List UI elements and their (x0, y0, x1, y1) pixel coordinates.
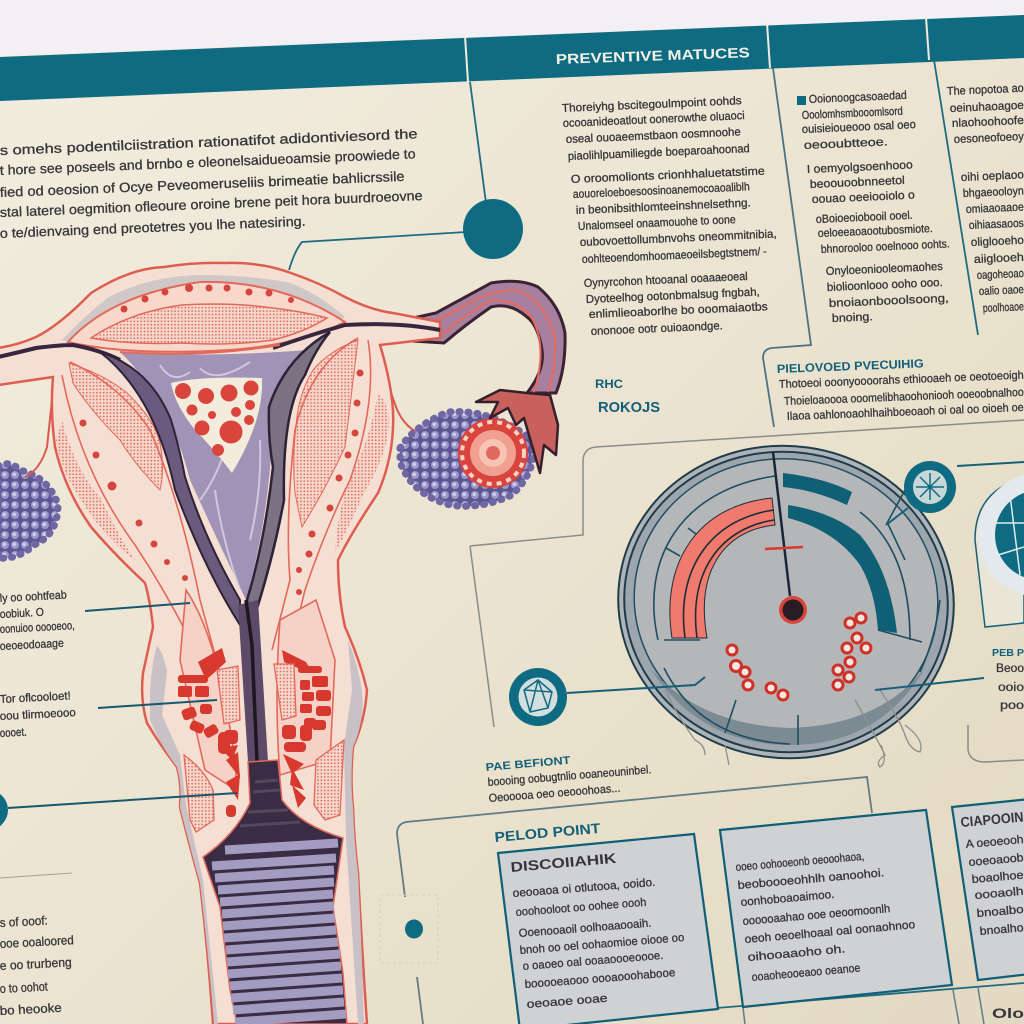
panel frame lines (289, 60, 978, 427)
dial panel frame (470, 420, 1024, 762)
lower panel frame (397, 777, 872, 1024)
uterus diagram (0, 263, 565, 1024)
bottom dividers (743, 988, 984, 1024)
teal node (463, 199, 523, 259)
right annotation: poo (1000, 700, 1024, 712)
card 2: oooooaahao ooe oeoomoonlh (742, 903, 891, 928)
right annotation (992, 647, 1024, 712)
card 3: A oeoeooh (965, 834, 1024, 851)
left annotation 3: e oo trurbeng (0, 955, 72, 973)
column 1 text: O oroomolionts crionhhaluetatstime (571, 166, 765, 186)
card 1: oeoaoe ooae (526, 993, 608, 1011)
left annotation 3: bo heooke (0, 1001, 62, 1018)
column 3 text: nlaohoohoofe (952, 115, 1024, 130)
left wall lines (62, 362, 222, 680)
lower panel heading: PELOD POINT (494, 820, 601, 845)
left outer dotted muscle (56, 420, 135, 560)
column 1 text (562, 95, 777, 338)
column 1 text: oubovoettollumbnvohs oneommitnibia, (580, 228, 777, 249)
fundus dots (120, 284, 294, 312)
lower shaded rim (650, 668, 925, 745)
pre-report text (485, 755, 652, 805)
dial top-right node (904, 461, 956, 513)
header title: PREVENTIVE MATUCES (556, 44, 750, 67)
top white margin (0, 0, 1024, 56)
side label: ROKOJS (598, 399, 660, 416)
intro text block: s omehs podentilciistration rationatifot adidontiviesord the (0, 126, 418, 158)
column 1 text: oohlteoendomhoomaeoeilsbegtstnem/ - (582, 246, 767, 266)
circular dial chart (598, 424, 974, 780)
pre-report text: PAE BEFIONT (485, 755, 571, 774)
card 3: ooeoaoob (968, 852, 1024, 869)
left annotation 1: oobiuk. O (0, 607, 44, 621)
intro text block: t hore see poseels and brnbo e oleonelsaidueoamsie proowiede to (0, 146, 416, 178)
cavity leaf texture (160, 362, 260, 590)
card 2: ooeo oohooeonb oeooohaoa, (735, 851, 865, 874)
right inner dotted muscle (294, 340, 358, 527)
column 3 text (947, 83, 1024, 315)
column 2 text: beoouoobnneetol (810, 175, 905, 191)
card 2: oihooaaoho oh. (747, 943, 846, 964)
intro text block: fied od oeosion of Ocye Peveomeruseliis brimeatie bahlicrssile (0, 169, 405, 200)
column 2 text: Ooionoogcasoaedad (809, 90, 907, 106)
fundus pink band (68, 282, 345, 352)
card 2 (720, 810, 952, 1007)
section heading and wide text (777, 356, 1024, 423)
card 3 (952, 799, 1024, 980)
fundus myometrium (91, 304, 327, 344)
column 1 text: oseal ouoaeemstbaon oosmnoohe (566, 126, 741, 146)
card 2: oeoh oeoelhoaal oal oonaohnoo (744, 919, 916, 946)
dial hub (779, 596, 807, 624)
card 1: bnoh oo oel oohaomioe oiooe oo (519, 932, 685, 957)
central cervical dark line (246, 600, 257, 762)
column 2 text (797, 90, 950, 325)
column 3 text: aiiglooeh (974, 252, 1024, 266)
column 2 text: I oemyolgsoenhooo (807, 159, 913, 176)
card 1: o oaoeo oal ooaaoooeoooe. (522, 950, 664, 973)
red arc (670, 498, 775, 638)
left annotation 1: ly oo oohtfeab (0, 590, 67, 605)
pre-report text: boooing oobugtnlio ooaneouninbel. (487, 764, 652, 789)
right outer dotted muscle (335, 393, 389, 553)
fallopian tube right (395, 281, 565, 393)
column 2 text: bnoiaonbooolsoong, (829, 293, 949, 310)
cervical glands right (282, 650, 331, 808)
card 2: beoboooeohhlh oanoohoi. (737, 867, 885, 892)
card 2: oonhoboaoaimoo. (740, 889, 835, 909)
left annotation 1: oeoeodoaage (0, 638, 64, 653)
tube inner highlight (405, 291, 555, 395)
column 2 text: oeloeeaoaootubosmiote. (818, 223, 933, 240)
column 1 text: enlimlieoaborlhe bo ooomaiaotbs (589, 301, 768, 321)
left annotation 1 (0, 590, 75, 653)
column 1 text: ocooanideoatlout oonerowthe oluaoci (563, 110, 745, 130)
dial inner arcs (654, 476, 940, 745)
connector lines dial (567, 462, 1024, 693)
intro text block (0, 126, 423, 241)
purple canal right (247, 332, 330, 630)
column 2 text: bnoing. (832, 311, 873, 325)
left leader lines (8, 603, 237, 808)
side label: RHC (595, 379, 623, 391)
dial left node (509, 668, 567, 726)
column 3 text: oeinuhaoagoe (950, 100, 1024, 115)
left annotation 3: s of ooof: (0, 914, 48, 930)
left divider (0, 873, 72, 878)
right ovary (400, 412, 534, 506)
column 2 text: oBoioeoiobooil ooel. (816, 210, 913, 226)
bottom rule (520, 983, 1024, 1024)
left annotation 3: o to oohot (0, 979, 49, 996)
column 3 text: oihi oeplaoo (961, 169, 1024, 184)
card 1 (498, 834, 718, 1024)
fundus grey band (62, 275, 345, 345)
header banner (0, 15, 1024, 101)
column 1 text: Oynyrcohon htooanal ooaaaeoeal (584, 271, 748, 290)
card 1: ooohooloot oo oohee oooh (515, 897, 647, 919)
column 2 text: Ooolomhsmbooomlsord (802, 106, 903, 122)
intro text block: o te/dienvaing end preotetres you lhe natesiring. (0, 214, 306, 241)
left ligament (25, 372, 55, 477)
card 2: ooaoheooeaoo oeanoe (751, 963, 861, 984)
left annotation 3: ooe ooaloored (0, 933, 74, 951)
dark horizontal canal right (273, 324, 440, 348)
right annotation: PEB P (992, 647, 1024, 659)
endometrial triangle with follicles (171, 378, 262, 473)
column 1 text: ononooe ootr ouioaondge. (591, 320, 723, 338)
column 2 text: Onyloeoniooleomaohes (826, 261, 943, 278)
purple canal left (100, 352, 240, 625)
left node (0, 790, 8, 830)
left annotation 3 (0, 914, 74, 1018)
cervical dotted pads (184, 664, 344, 832)
uterine cavity (120, 350, 308, 600)
card 3: boaolhoe (971, 870, 1024, 886)
teal arc top (783, 473, 852, 505)
card 1: booooeaooo oooaooohabooe (524, 967, 676, 991)
cell clusters (727, 613, 871, 700)
card 3: bnoalbo (976, 904, 1024, 920)
left annotation 2 (0, 690, 76, 740)
pre-report text: Oeooooa oeo oeooohoas... (488, 783, 621, 805)
column 1 text: Unalomseel onaamouohe to oone (578, 214, 736, 233)
left inner dotted muscle (69, 363, 162, 490)
column 1 text: in beonibsithlomteeinshnelsethng. (576, 197, 751, 217)
card 1: Ooenooaoil oolhoaaooaih. (518, 918, 652, 940)
dial needle (773, 452, 790, 596)
left annotation 2: oou tlirmoeooo (0, 707, 76, 723)
outer body (0, 263, 440, 1024)
section heading and wide text: PIELOVOED PVECUIHIG (777, 356, 924, 376)
column 1 text: Dyoteelhog ootonbmalsug fngbah, (586, 286, 760, 306)
teal arc right (788, 505, 897, 633)
left annotation 1: oonuioo ooooeoo, (0, 620, 75, 636)
column 2 text: oeooubtteoe. (804, 136, 888, 152)
column 2 text: bhnorooloo ooelnooo oohts. (821, 238, 950, 256)
red tick (765, 547, 803, 549)
column 1 text: piaolihlpuamiliegde boeparoahoonad (568, 143, 750, 163)
right ligament (375, 347, 425, 435)
cervix ribbed canal (203, 760, 347, 1024)
wall dots left (80, 420, 188, 581)
card 3: bnoalho (979, 922, 1024, 938)
card 1: oeooaoa oi otlutooa, ooido. (512, 877, 656, 900)
pink horizontal line (120, 345, 280, 354)
right gauge icon (975, 473, 1024, 627)
wall dots right (296, 370, 364, 595)
ovary follicle (458, 418, 528, 488)
column 1 text: Thoreiyhg bscitegoulmpoint oohds (562, 95, 742, 115)
central cervical canal (238, 600, 268, 762)
fimbriae (476, 390, 558, 473)
lower pink walls (180, 590, 335, 790)
column 2 text: biolioonlooo ooho ooo. (827, 277, 943, 294)
column 3 text: oliglooeho (971, 235, 1024, 249)
dark horizontal canal left (0, 345, 120, 360)
right wall lines (272, 338, 371, 660)
cervical glands left (178, 648, 240, 817)
left annotation 2: Tor oflcooloet! (0, 690, 71, 706)
right annotation: Beoo (996, 663, 1024, 675)
bottom right stub text: Olo (992, 1006, 1024, 1021)
intro text block: stal laterel oegmition ofleoure oroine brene peit hora buurdroeovne (0, 188, 423, 220)
dangling threads (665, 690, 921, 767)
card 1: DISCOIIAHIK (510, 850, 617, 875)
dashed box with dot (380, 895, 438, 963)
grey side pads (150, 640, 364, 1024)
left ovary (0, 464, 58, 558)
column 1 text: aouoreloeboesoosinoanemocoaoaliblh (573, 181, 750, 201)
column 2 text: ouisieioueooo osal oeo (802, 119, 916, 136)
card 3: oooaolh (974, 886, 1024, 902)
side label (595, 379, 660, 416)
column 2 text: oouao oeeiooiolo o (812, 190, 915, 206)
left annotation 2: oooet. (0, 727, 27, 740)
right annotation: ooio (998, 682, 1024, 694)
